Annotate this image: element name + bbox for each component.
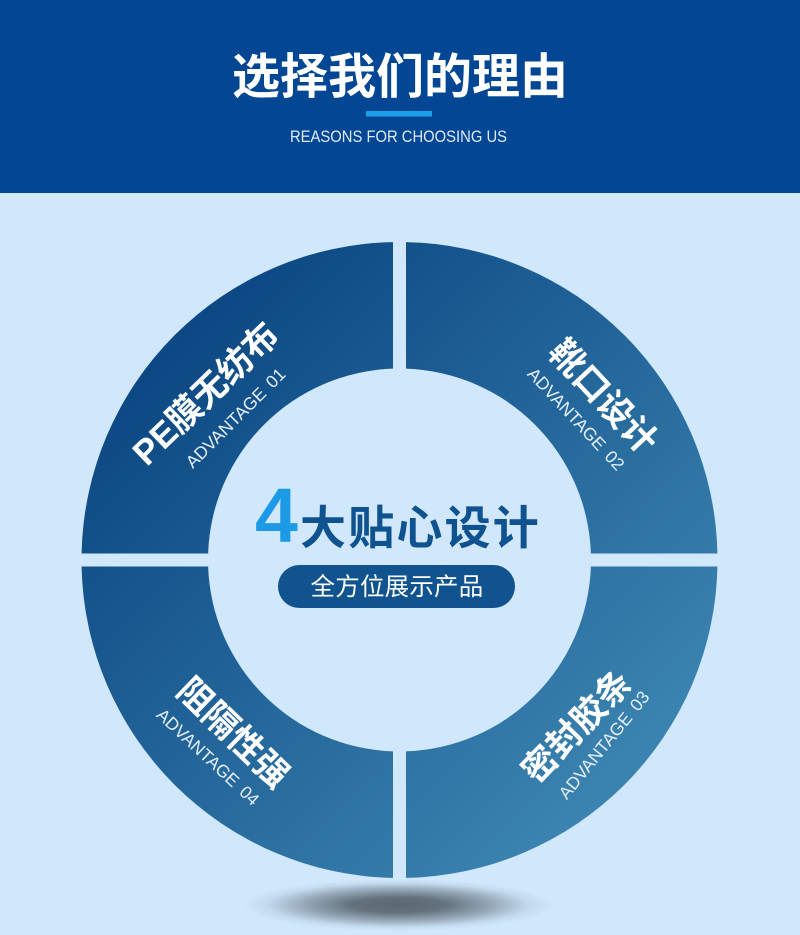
panel: advantage 03 (406, 566, 717, 878)
advantage 04 label: ADVANTAGE 04 (153, 704, 264, 810)
panel: advantage 04 (82, 566, 393, 878)
subtitle: REASONS FOR CHOOSING US (290, 128, 507, 146)
advantage 03 heading: 密封胶条 (514, 663, 640, 791)
panel: advantage 02 (406, 242, 717, 554)
center pill: 全方位展示产品 (311, 573, 483, 601)
advantage 01 label: ADVANTAGE 01 (182, 364, 289, 472)
advantage 02 label: ADVANTAGE 02 (523, 364, 629, 474)
ground shadow (243, 879, 553, 931)
advantage 04 heading: 阻隔性强 (169, 670, 297, 796)
center heading text: 大贴心设计 (300, 502, 541, 554)
advantage 03 label: ADVANTAGE 03 (554, 687, 654, 803)
center pill (278, 565, 515, 608)
numeral 4: 4 (255, 473, 298, 559)
title accent bar (366, 111, 432, 116)
advantage 01 heading: PE膜无纺布 (125, 315, 287, 473)
header band (0, 0, 800, 193)
center heading (255, 473, 541, 559)
title: 选择我们的理由 (232, 51, 568, 104)
panel: advantage 01 (82, 242, 393, 554)
advantage 02 heading: 靴口设计 (541, 333, 665, 462)
